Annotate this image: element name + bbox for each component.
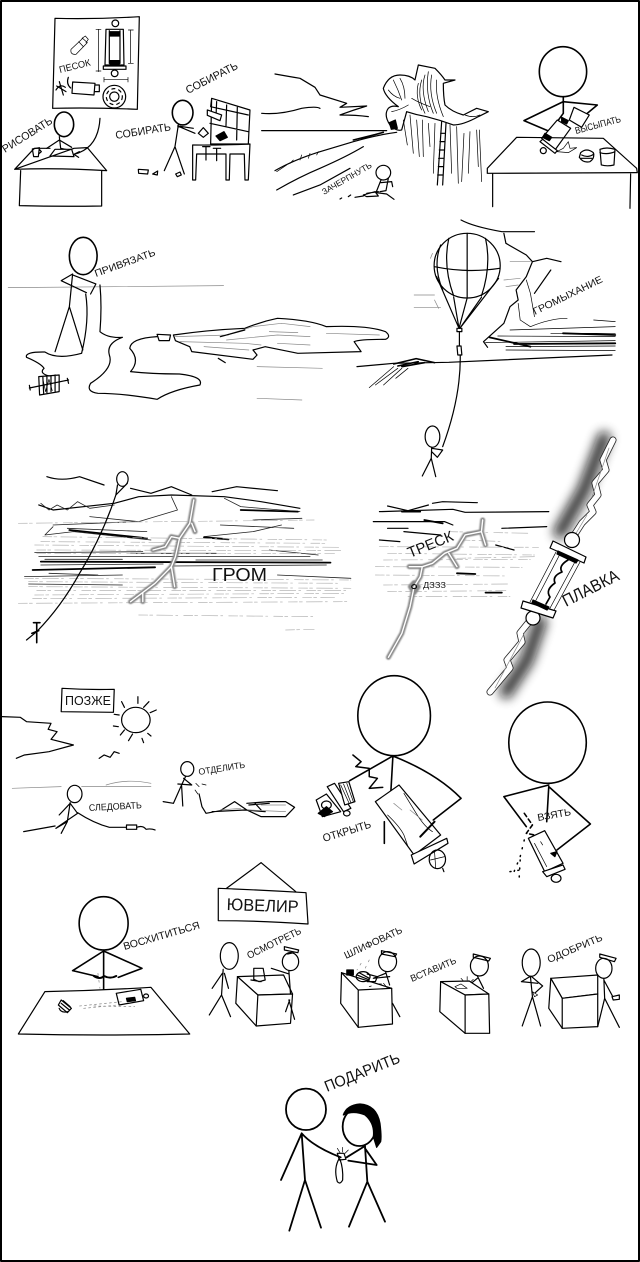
label: sand: ПЕСОК <box>58 57 92 76</box>
table with sand, cup <box>487 137 637 208</box>
small figure scooping <box>340 165 394 199</box>
panel: jeweller <box>18 863 619 1035</box>
panel: draw the design <box>15 17 250 206</box>
person assembling at workbench <box>138 98 250 180</box>
panel: cliff and wave <box>262 47 637 208</box>
label: inspect: ОСМОТРЕТЬ <box>245 926 304 962</box>
woman <box>343 1104 385 1227</box>
lightning bolt ТРЕСК <box>388 520 486 657</box>
small figure holding string <box>422 426 443 477</box>
sign: jeweller <box>218 863 308 924</box>
crucible tube <box>521 532 586 625</box>
opened tube held <box>375 785 448 872</box>
label: scoop: ЗАЧЕРПНУТЬ <box>320 160 374 197</box>
label: draw: РИСОВАТЬ <box>0 115 55 156</box>
distant clouds and shore <box>262 74 397 195</box>
label: detach: ОТДЕЛИТЬ <box>198 760 246 777</box>
breaking wave on cliff <box>383 65 488 185</box>
panel: later, sunny beach <box>2 676 590 882</box>
storm clouds and horizon <box>357 220 615 388</box>
label: smelting: ПЛАВКА <box>559 566 623 611</box>
figure following cord <box>12 781 155 833</box>
small balloon and string left <box>27 472 128 643</box>
label: open: ОТКРЫТЬ <box>321 819 373 845</box>
table with sand and tube <box>18 987 190 1035</box>
shadow band <box>506 438 604 692</box>
lightning bolt ГРОМ <box>131 500 195 602</box>
big figure admiring <box>73 897 142 990</box>
person drawing at desk <box>32 112 74 157</box>
label: approve: ОДОБРИТЬ <box>546 932 605 966</box>
horizon <box>8 286 322 400</box>
arrow: paper to desk <box>74 118 100 157</box>
label: buzz: ДЗЗЗ <box>423 581 446 590</box>
inserting jeweller <box>440 954 490 1033</box>
large figure taking gem <box>504 702 590 882</box>
desk <box>15 148 107 206</box>
figure detaching cord from wreck <box>163 762 295 817</box>
label: follow: СЛЕДОВАТЬ <box>89 800 142 814</box>
label: rumbling: ГРОМЫХАНИЕ <box>531 274 605 318</box>
grinding jeweller <box>341 951 400 1027</box>
label: assemble left: СОБИРАТЬ <box>115 121 172 142</box>
coiled cord and spool <box>26 285 201 399</box>
glowing strip <box>490 440 613 692</box>
customer and jeweller 1 <box>209 943 299 1026</box>
panel: giving the gem <box>281 1089 385 1231</box>
large figure pouring sand <box>524 47 597 154</box>
label: give: ПОДАРИТЬ <box>322 1050 403 1096</box>
large figure opening tube <box>316 676 461 843</box>
label: admire: ВОСХИТИТЬСЯ <box>122 920 201 953</box>
sun <box>113 697 156 743</box>
storm streaks left <box>18 477 351 630</box>
panel: lightning tube <box>490 438 613 692</box>
label: pour: ВЫСЫПАТЬ <box>574 114 622 137</box>
label: later: ПОЗЖЕ <box>65 693 111 708</box>
cloud lines <box>2 717 119 758</box>
gem pendant <box>336 1147 348 1183</box>
balloon <box>434 233 500 447</box>
storm streaks right <box>373 502 549 597</box>
label: insert: ВСТАВИТЬ <box>409 955 458 985</box>
label: tie: ПРИВЯЗАТЬ <box>93 247 158 280</box>
label: thunder: ГРОМ <box>212 565 267 585</box>
label: jeweller: ЮВЕЛИР <box>226 895 299 917</box>
panel: tying string and balloon launch <box>8 220 615 477</box>
man <box>281 1089 341 1231</box>
sign: later <box>61 688 114 712</box>
label: assemble upper: СОБИРАТЬ <box>184 60 240 97</box>
approving customer and jeweller <box>521 949 619 1028</box>
label: take: ВЗЯТЬ <box>537 807 572 824</box>
blueprint paper <box>53 17 139 109</box>
figure tying cord <box>55 237 97 352</box>
label: crack: ТРЕСК <box>405 528 456 562</box>
balloon being inflated from can <box>157 318 389 363</box>
label: polish: ШЛИФОВАТЬ <box>343 925 405 962</box>
